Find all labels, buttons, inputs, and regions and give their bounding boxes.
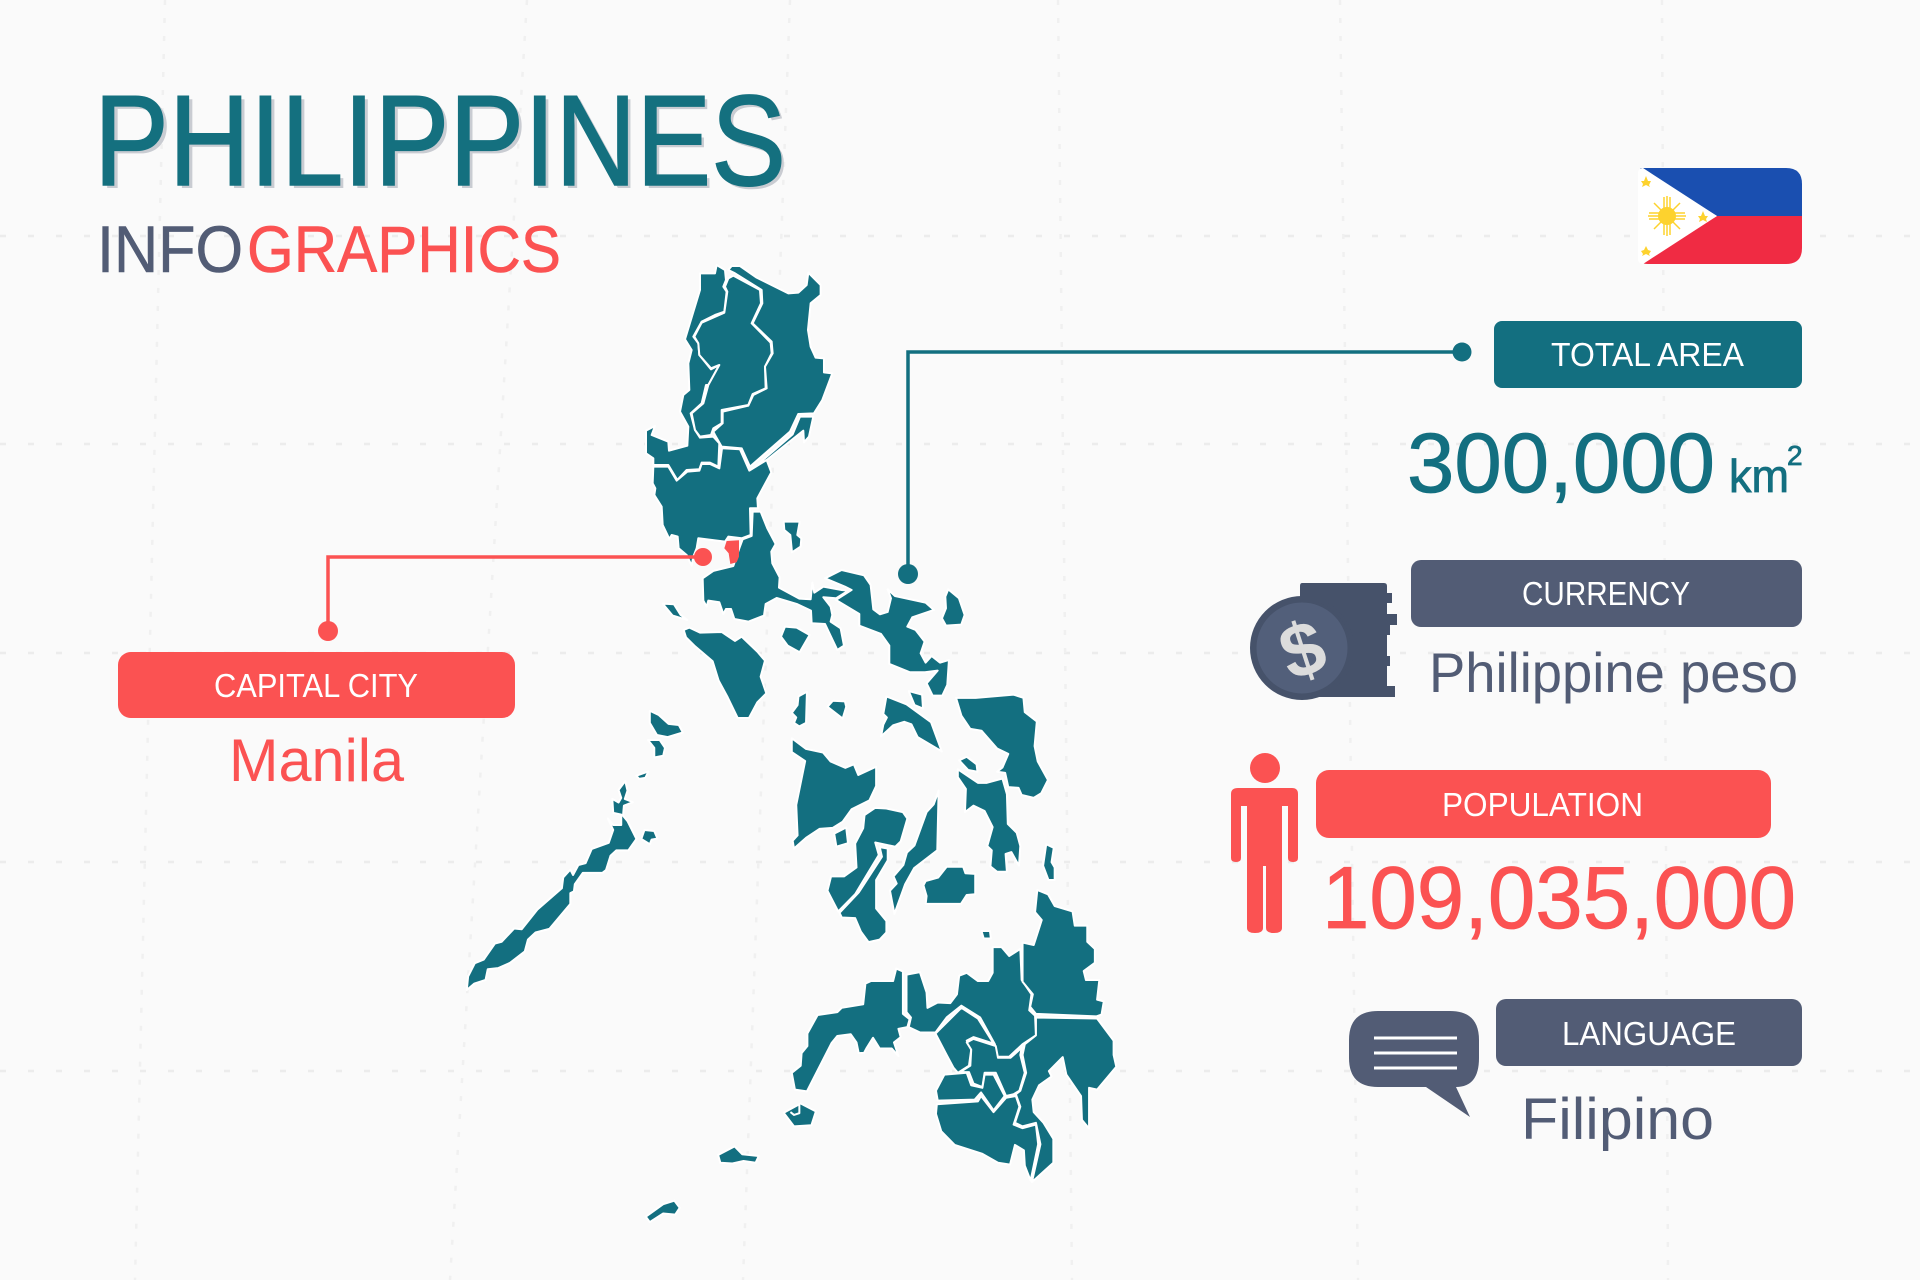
language value: Filipino (1521, 1087, 1714, 1152)
flag stars (1641, 176, 1708, 256)
icon: person (1231, 753, 1298, 933)
subtitle: GRAPHICS (247, 212, 561, 286)
connector: total area (898, 342, 1472, 584)
total area label (1494, 321, 1802, 388)
panel: total area (1407, 321, 1803, 510)
total area value: km (1729, 450, 1789, 502)
population label: POPULATION (1442, 786, 1643, 823)
total area value: 2 (1787, 440, 1803, 471)
currency value: Philippine peso (1429, 641, 1798, 704)
capital city label (118, 652, 515, 718)
connector: capital city (318, 548, 712, 641)
total area value: 300,000 (1407, 416, 1715, 510)
panel: language (1349, 999, 1802, 1152)
capital city label: CAPITAL CITY (214, 667, 418, 704)
panel: capital city (118, 652, 515, 794)
panel: currency (1250, 560, 1802, 704)
title: PHILIPPINES (98, 72, 789, 216)
map: Luzon and Visayas north (646, 265, 965, 718)
population label (1316, 770, 1771, 838)
icon: coins: $ (1270, 603, 1336, 697)
flag of the Philippines (1638, 168, 1802, 264)
panel: population (1231, 753, 1796, 947)
subtitle: INFO (97, 212, 243, 286)
language label (1496, 999, 1802, 1066)
currency label (1411, 560, 1802, 627)
map: Metro Manila highlight (724, 540, 739, 564)
currency label: CURRENCY (1522, 575, 1690, 612)
capital city value: Manila (229, 727, 405, 794)
title: PHILIPPINES (94, 69, 786, 213)
flag sun (1648, 196, 1686, 236)
language label: LANGUAGE (1562, 1015, 1736, 1052)
total area label: TOTAL AREA (1551, 336, 1744, 373)
map: Palawan, Visayas and Mindanao (467, 691, 1116, 1222)
subtitle (97, 212, 561, 286)
icon: speech bubble (1349, 1011, 1479, 1117)
icon: coins (1250, 583, 1397, 700)
population value: 109,035,000 (1322, 848, 1796, 947)
map: Philippines (467, 265, 1116, 1222)
